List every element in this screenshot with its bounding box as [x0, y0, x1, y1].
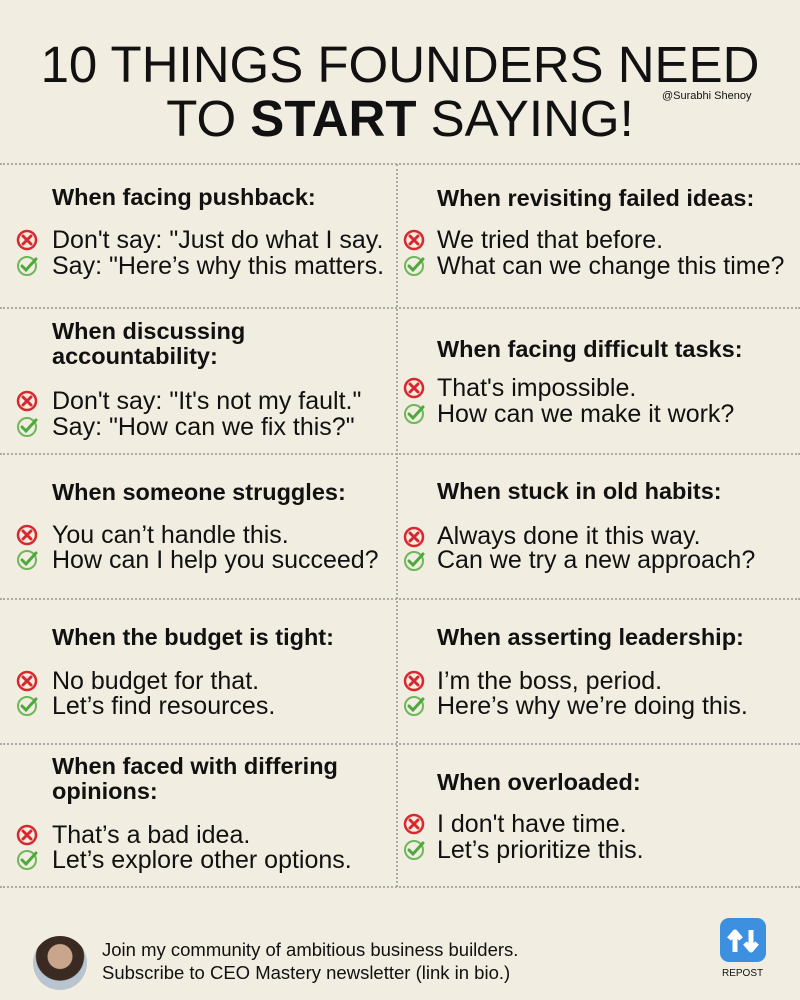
- panel: facing pushback: Don't say: "Just do what I say.: [52, 226, 383, 254]
- panel: accountability: [16, 318, 361, 441]
- panel: old habits: [404, 478, 755, 574]
- panel: budget tight: When the budget is tight:: [52, 624, 334, 650]
- panel: asserting leadership: [404, 624, 748, 720]
- panel: differing opinions: Let’s explore other options.: [52, 846, 352, 874]
- panel: old habits: Can we try a new approach?: [437, 546, 755, 574]
- panel: differing opinions: When faced with differing: [52, 753, 338, 779]
- panel: asserting leadership: I’m the boss, period.: [437, 667, 662, 695]
- panel: old habits: When stuck in old habits:: [437, 478, 722, 504]
- panel: accountability: accountability:: [52, 343, 218, 369]
- panel: someone struggles: When someone struggles:: [52, 479, 346, 505]
- footer text: [102, 939, 518, 983]
- panel: facing pushback: Say: "Here’s why this matters.: [52, 252, 384, 280]
- panel: overloaded: I don't have time.: [437, 810, 627, 838]
- icon: repost: [720, 918, 766, 979]
- panel: accountability: When discussing: [52, 318, 245, 344]
- panel: facing pushback: [16, 184, 384, 280]
- footer text: Join my community of ambitious business builders.: [102, 939, 518, 960]
- panel: overloaded: [404, 769, 644, 864]
- panel: overloaded: Let’s prioritize this.: [437, 836, 644, 864]
- panel: revisiting failed ideas: We tried that before.: [437, 226, 663, 254]
- panel: asserting leadership: Here’s why we’re doing this.: [437, 692, 748, 720]
- panel: revisiting failed ideas: When revisiting failed ideas:: [437, 185, 754, 211]
- panel: budget tight: Let’s find resources.: [52, 692, 275, 720]
- panel: revisiting failed ideas: [404, 185, 784, 280]
- panel: differing opinions: opinions:: [52, 778, 158, 804]
- panel: overloaded: When overloaded:: [437, 769, 641, 795]
- panel: someone struggles: You can’t handle this.: [52, 521, 289, 549]
- panel: difficult tasks: That's impossible.: [437, 374, 636, 402]
- icon: repost: REPOST: [722, 968, 763, 979]
- panel: difficult tasks: When facing difficult tasks:: [437, 336, 743, 362]
- panel: accountability: Don't say: "It's not my fault.": [52, 387, 361, 415]
- panel: difficult tasks: How can we make it work?: [437, 400, 734, 428]
- panel: budget tight: No budget for that.: [52, 667, 259, 695]
- panel: asserting leadership: When asserting leadership:: [437, 624, 744, 650]
- panel: differing opinions: That’s a bad idea.: [52, 821, 250, 849]
- author handle: @Surabhi Shenoy: [662, 90, 751, 102]
- footer avatar: [33, 936, 87, 990]
- title: TO START SAYING!: [166, 90, 634, 147]
- footer text: Subscribe to CEO Mastery newsletter (link in bio.): [102, 962, 510, 983]
- panel: revisiting failed ideas: What can we change this time?: [437, 252, 784, 280]
- title: 10 THINGS FOUNDERS NEED: [41, 36, 759, 93]
- panel: someone struggles: How can I help you succeed?: [52, 546, 379, 574]
- title: [41, 36, 759, 147]
- panel: facing pushback: When facing pushback:: [52, 184, 316, 210]
- panel: accountability: Say: "How can we fix this?": [52, 413, 355, 441]
- panel: budget tight: [16, 624, 334, 720]
- panel: someone struggles: [16, 479, 379, 574]
- panel: differing opinions: [16, 753, 352, 874]
- panel: difficult tasks: [404, 336, 743, 428]
- panel: old habits: Always done it this way.: [437, 522, 701, 550]
